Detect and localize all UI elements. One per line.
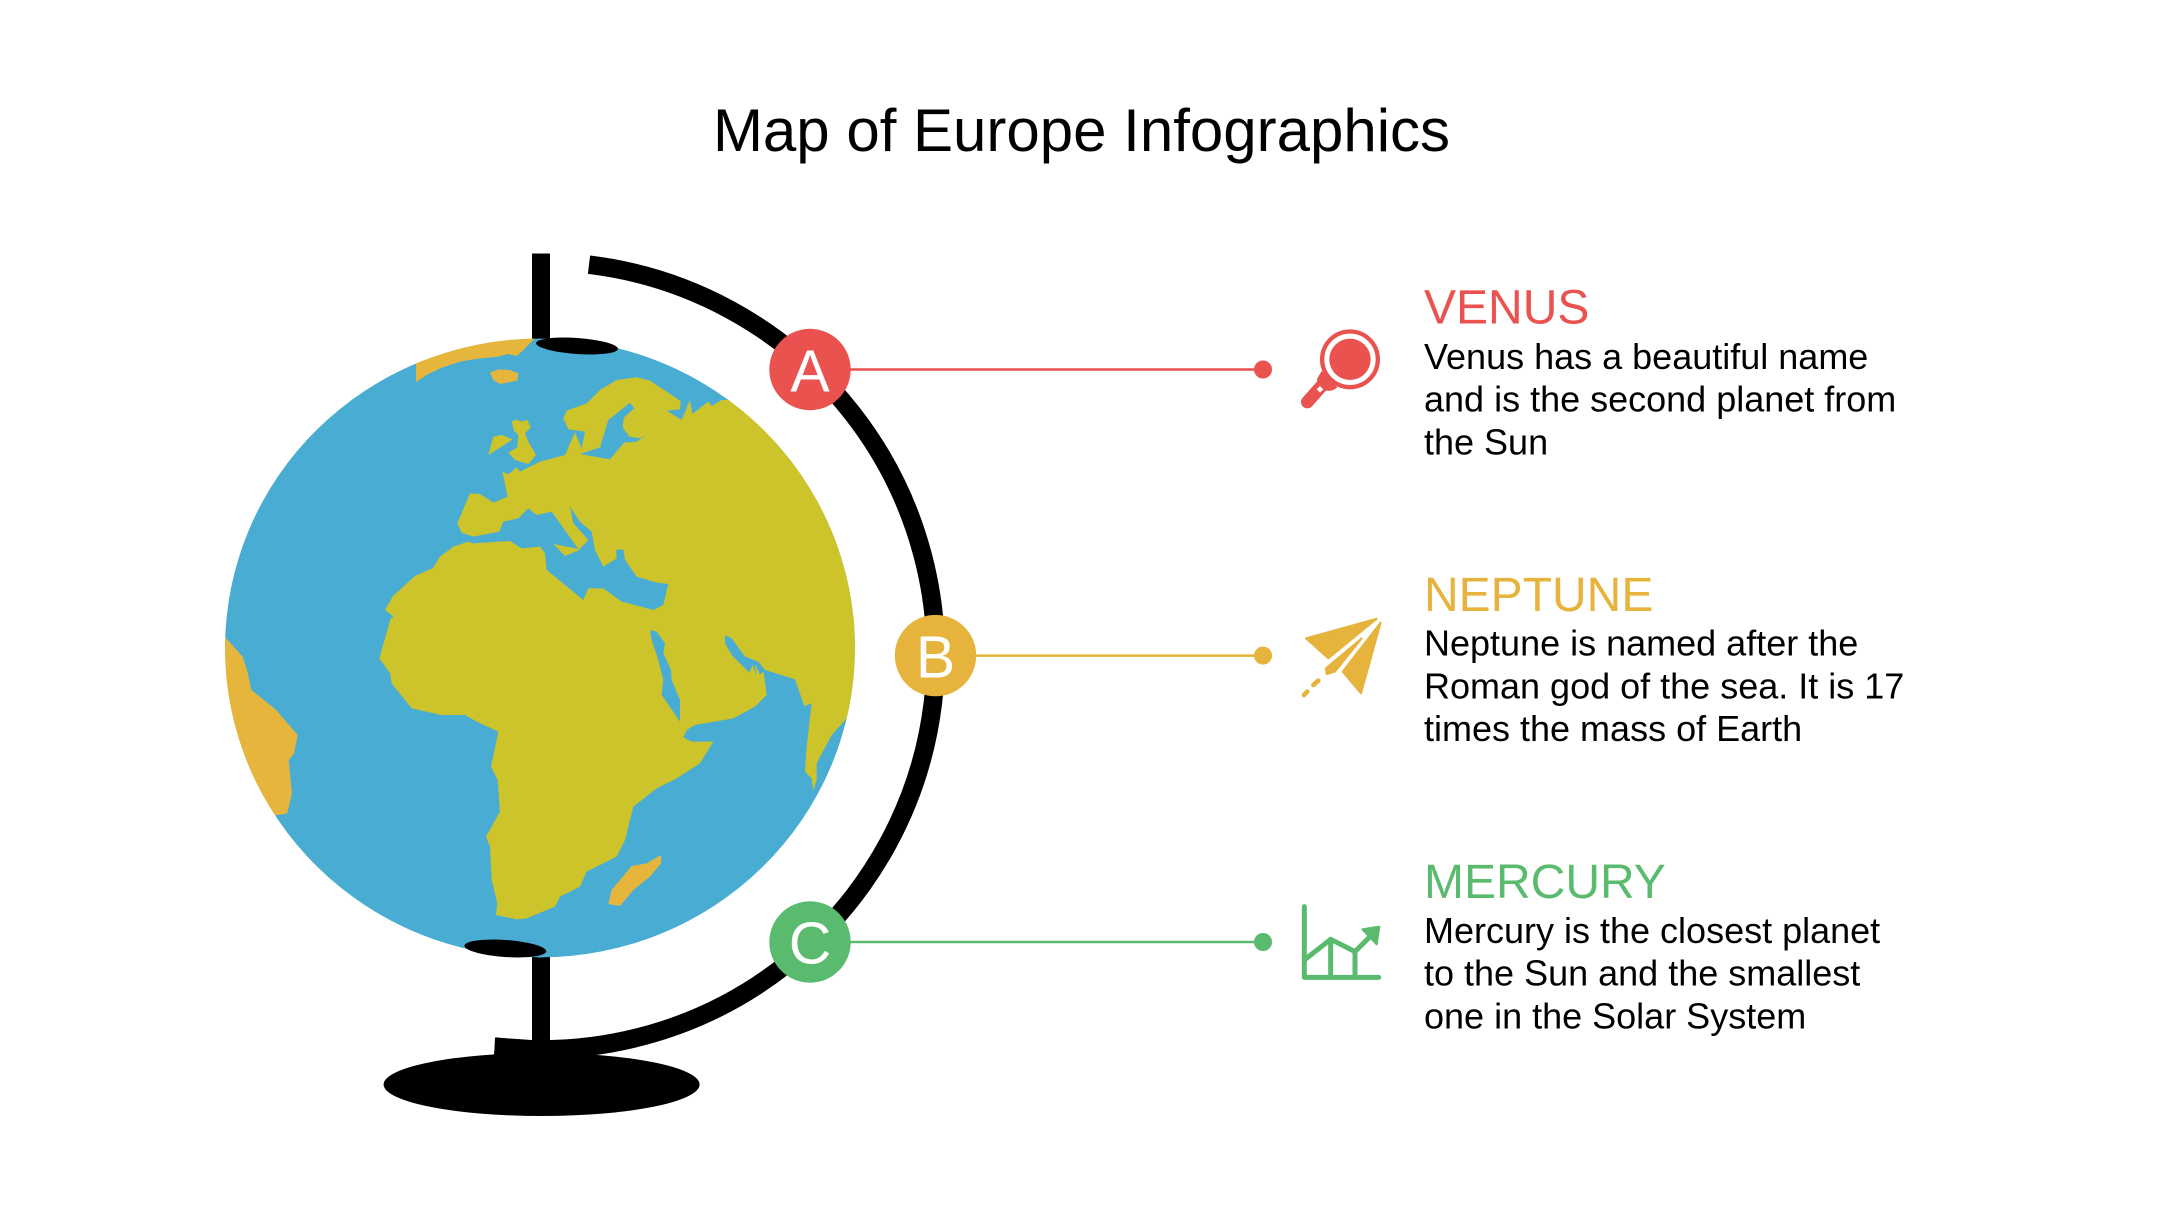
stand foot block xyxy=(494,1038,560,1070)
icon: paper plane xyxy=(1304,619,1381,695)
title: Map of Europe Infographics xyxy=(713,97,1450,164)
text block: Venus: Venus has a beautiful name xyxy=(1424,336,1868,377)
text block: Mercury: to the Sun and the smallest xyxy=(1424,953,1860,994)
South America xyxy=(225,638,298,815)
text block: Venus: the Sun xyxy=(1424,421,1548,462)
connector A xyxy=(845,360,1272,378)
text block: Venus: and is the second planet from xyxy=(1424,379,1896,420)
text block: Mercury: MERCURY xyxy=(1424,856,1666,909)
globe with stand xyxy=(191,254,940,1116)
text block: Neptune: Roman god of the sea. It is 17 xyxy=(1424,665,1904,706)
marker A: A xyxy=(790,338,830,404)
text block: Neptune: NEPTUNE xyxy=(1424,569,1653,622)
text block: Mercury xyxy=(1424,856,1880,1036)
connector B xyxy=(970,647,1272,665)
text block: Venus: VENUS xyxy=(1424,281,1589,334)
globe xyxy=(225,338,855,958)
marker B xyxy=(895,615,976,696)
lower pole xyxy=(532,950,550,1070)
land: northern part xyxy=(385,338,854,624)
base xyxy=(384,1053,700,1116)
Baltic sea xyxy=(580,403,647,459)
Madagascar xyxy=(608,855,661,906)
text block: Mercury: Mercury is the closest planet xyxy=(1424,910,1880,951)
connector C xyxy=(845,933,1272,951)
Red Sea xyxy=(650,630,680,722)
upper pole xyxy=(532,254,550,348)
Greenland xyxy=(416,337,537,382)
marker A xyxy=(769,329,851,410)
icon: growth chart xyxy=(1304,907,1379,977)
Great Britain xyxy=(508,419,536,464)
text block: Neptune: Neptune is named after the xyxy=(1424,623,1858,664)
icon: magnifier xyxy=(1307,331,1378,402)
Iceland xyxy=(490,369,518,384)
bottom pivot xyxy=(464,937,547,960)
land: southern part xyxy=(379,618,855,920)
ocean xyxy=(225,338,855,958)
marker B: B xyxy=(916,624,955,690)
top pivot xyxy=(536,335,618,357)
marker C xyxy=(769,901,851,983)
text block: Mercury: one in the Solar System xyxy=(1424,995,1806,1036)
text block: Neptune: times the mass of Earth xyxy=(1424,708,1802,749)
text block: Venus xyxy=(1424,281,1896,462)
stand arc xyxy=(495,265,936,1049)
text block: Neptune xyxy=(1424,569,1904,749)
Persian Gulf xyxy=(725,635,765,675)
marker C: C xyxy=(789,910,831,976)
Ireland xyxy=(488,435,513,455)
